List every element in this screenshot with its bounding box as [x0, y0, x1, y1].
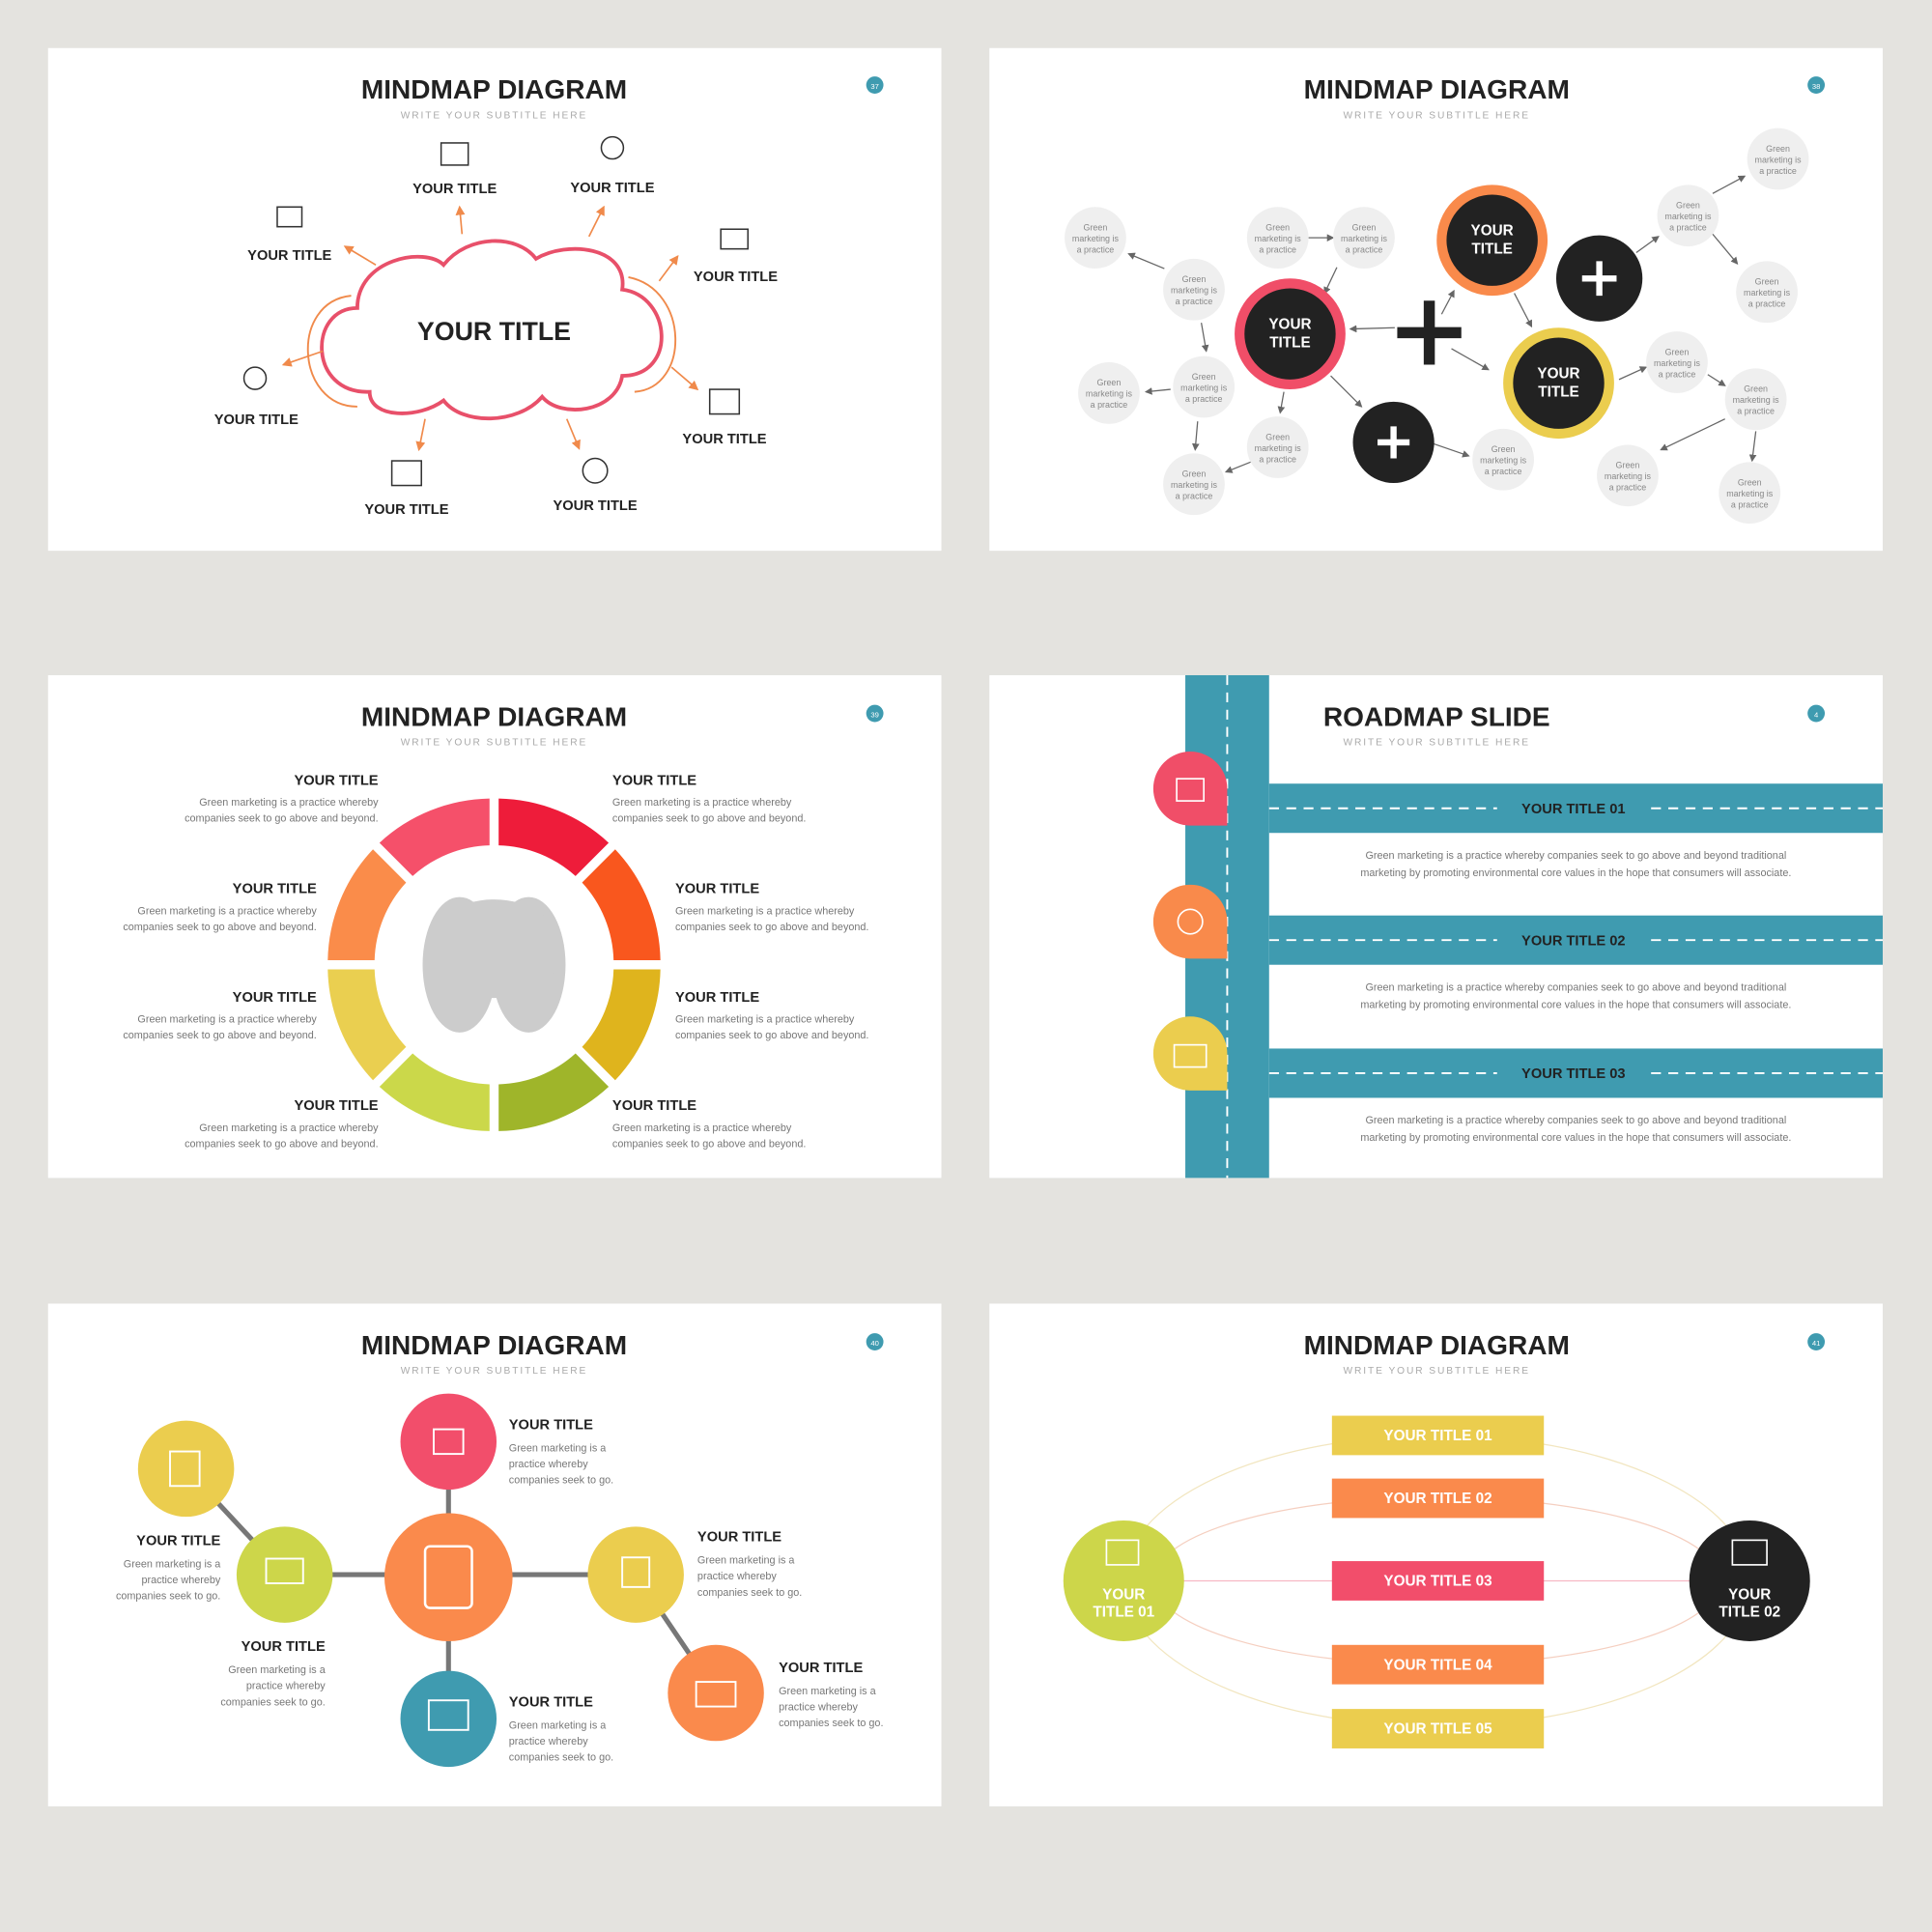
wheel labels: companies seek to go above and beyond. [675, 922, 868, 933]
node texts: marketing is [1733, 395, 1779, 405]
hub labels: YOUR TITLE [509, 1418, 593, 1434]
heading: MINDMAP DIAGRAM [361, 74, 627, 104]
road titles and texts: YOUR TITLE 03 [1521, 1066, 1626, 1082]
road titles and texts: Green marketing is a practice whereby companies seek to go above and beyond traditional [1365, 1115, 1786, 1126]
node texts: Green [1766, 144, 1790, 154]
wheel labels: YOUR TITLE [612, 773, 696, 788]
node texts: marketing is [1072, 234, 1119, 243]
node texts: a practice [1259, 244, 1296, 254]
cloud: YOUR TITLE [417, 317, 571, 346]
node texts: Green [1755, 277, 1778, 287]
wheel labels: YOUR TITLE [612, 1098, 696, 1114]
node texts: marketing is [1744, 288, 1791, 298]
labels with icons [214, 137, 778, 518]
end nodes: TITLE 01 [1093, 1604, 1155, 1620]
road titles and texts [1360, 802, 1791, 1144]
node texts: marketing is [1255, 443, 1301, 453]
page badge [867, 1333, 884, 1350]
rays [283, 207, 697, 450]
title bars: YOUR TITLE 05 [1383, 1721, 1492, 1738]
small nodes [1065, 128, 1808, 524]
page badge: 37 [870, 82, 879, 91]
road titles and texts: YOUR TITLE 02 [1521, 933, 1626, 949]
node texts: Green [1084, 223, 1107, 233]
wheel labels: Green marketing is a practice whereby [612, 1122, 792, 1134]
wheel labels: Green marketing is a practice whereby [675, 905, 855, 917]
heading: MINDMAP DIAGRAM [1304, 74, 1570, 104]
node texts: marketing is [1171, 286, 1218, 296]
heading [1304, 74, 1570, 121]
wheel labels: Green marketing is a practice whereby [199, 1122, 379, 1134]
hub labels: Green marketing is a [509, 1720, 607, 1732]
page badge: 38 [1812, 82, 1820, 91]
hub labels: companies seek to go. [779, 1718, 883, 1729]
hub labels: practice whereby [779, 1701, 859, 1713]
node texts: Green [1097, 378, 1121, 387]
page badge [1807, 705, 1825, 722]
road titles and texts: Green marketing is a practice whereby companies seek to go above and beyond traditional [1365, 850, 1786, 862]
road [1185, 675, 1883, 1178]
node texts: a practice [1669, 223, 1707, 233]
hub labels: YOUR TITLE [509, 1695, 593, 1711]
wheel labels [123, 773, 868, 1150]
panel: wheel mindmap [48, 675, 941, 1178]
hub labels: Green marketing is a [228, 1664, 327, 1676]
wheel labels: companies seek to go above and beyond. [123, 922, 317, 933]
node texts: marketing is [1726, 489, 1774, 498]
node texts: a practice [1748, 299, 1785, 309]
labels with icons: YOUR TITLE [682, 432, 767, 447]
hub labels: Green marketing is a [124, 1558, 221, 1570]
connectors [186, 1441, 716, 1719]
panel: cloud mindmap [48, 48, 941, 551]
cloud [308, 241, 675, 418]
hub labels: practice whereby [509, 1736, 588, 1747]
title bars: YOUR TITLE 01 [1383, 1428, 1492, 1444]
title bars [1332, 1416, 1544, 1748]
wheel labels: YOUR TITLE [233, 990, 317, 1006]
node texts: a practice [1176, 492, 1212, 501]
end nodes: YOUR [1728, 1587, 1771, 1604]
main nodes: YOUR [1537, 366, 1580, 383]
node texts: a practice [1659, 369, 1695, 379]
hub labels: practice whereby [509, 1459, 588, 1470]
node texts: Green [1744, 384, 1768, 394]
hub labels: YOUR TITLE [242, 1639, 326, 1655]
node texts: marketing is [1341, 234, 1388, 243]
hub labels: YOUR TITLE [779, 1661, 863, 1676]
hub labels [116, 1418, 883, 1764]
hub labels: practice whereby [141, 1575, 221, 1586]
node texts: a practice [1077, 244, 1114, 254]
node texts: Green [1738, 478, 1762, 488]
node texts: a practice [1176, 297, 1212, 306]
labels with icons: YOUR TITLE [554, 498, 638, 514]
heading [1304, 1330, 1570, 1377]
node texts: Green [1492, 444, 1516, 454]
node texts: Green [1616, 461, 1639, 470]
page badge: 4 [1814, 710, 1819, 719]
node texts: a practice [1091, 400, 1127, 410]
page badge [1807, 76, 1825, 94]
labels with icons: YOUR TITLE [364, 502, 449, 518]
node texts: Green [1676, 201, 1700, 211]
title bars: YOUR TITLE 04 [1383, 1657, 1492, 1673]
node texts: marketing is [1664, 212, 1712, 221]
hub labels: companies seek to go. [116, 1591, 220, 1603]
main nodes: TITLE [1471, 242, 1513, 258]
hub labels: YOUR TITLE [136, 1533, 221, 1548]
main nodes [1239, 189, 1609, 434]
heading: MINDMAP DIAGRAM [361, 1330, 627, 1360]
heading: WRITE YOUR SUBTITLE HERE [1344, 738, 1530, 749]
node texts: a practice [1185, 394, 1223, 404]
heading: WRITE YOUR SUBTITLE HERE [1344, 110, 1530, 121]
road markers [1153, 752, 1227, 1091]
hub labels: Green marketing is a [779, 1686, 877, 1697]
main nodes: TITLE [1538, 384, 1579, 401]
node texts: marketing is [1654, 358, 1701, 368]
end nodes: TITLE 02 [1719, 1604, 1780, 1620]
page badge: 40 [870, 1339, 879, 1348]
wheel labels: Green marketing is a practice whereby [137, 1014, 317, 1026]
connectors [1128, 176, 1756, 472]
heading: ROADMAP SLIDE [1323, 701, 1550, 731]
page badge [1807, 1333, 1825, 1350]
road titles and texts: marketing by promoting environmental core values in the hope that consumers will associate. [1360, 1132, 1791, 1144]
heading: MINDMAP DIAGRAM [1304, 1330, 1570, 1360]
hub labels: companies seek to go. [697, 1587, 802, 1599]
node texts: a practice [1346, 244, 1382, 254]
ring segments [327, 799, 661, 1131]
connecting curves [1123, 1435, 1749, 1726]
panel: hub mindmap [48, 1303, 941, 1806]
node texts: Green [1265, 432, 1290, 441]
node texts: Green [1665, 347, 1689, 356]
wheel labels: companies seek to go above and beyond. [123, 1030, 317, 1041]
hub labels: companies seek to go. [509, 1475, 613, 1487]
main nodes: YOUR [1471, 223, 1514, 240]
panel: roadmap [989, 675, 1883, 1178]
heading [361, 74, 627, 121]
wheel labels: companies seek to go above and beyond. [612, 1138, 806, 1150]
page badge [867, 76, 884, 94]
node texts [1072, 144, 1802, 510]
wheel labels: YOUR TITLE [294, 773, 379, 788]
heading: WRITE YOUR SUBTITLE HERE [401, 1366, 587, 1377]
labels with icons: YOUR TITLE [412, 182, 497, 197]
node texts: marketing is [1171, 480, 1218, 490]
hub labels: Green marketing is a [509, 1443, 607, 1455]
heading: WRITE YOUR SUBTITLE HERE [401, 738, 587, 749]
heading [361, 1330, 627, 1377]
node texts: Green [1182, 469, 1206, 479]
hub labels: Green marketing is a [697, 1555, 795, 1567]
heading: MINDMAP DIAGRAM [361, 701, 627, 731]
panel: two-node mindmap [989, 1303, 1883, 1806]
wheel labels: YOUR TITLE [675, 990, 759, 1006]
main nodes: TITLE [1269, 335, 1311, 352]
hub labels: practice whereby [246, 1681, 326, 1692]
end nodes [1064, 1520, 1810, 1641]
heading: WRITE YOUR SUBTITLE HERE [401, 110, 587, 121]
hub nodes [138, 1394, 764, 1767]
wheel labels: Green marketing is a practice whereby [675, 1014, 855, 1026]
node texts: Green [1265, 223, 1290, 233]
node texts: marketing is [1180, 383, 1228, 392]
node texts: a practice [1759, 166, 1797, 176]
node texts: a practice [1609, 483, 1646, 493]
hub labels: companies seek to go. [509, 1752, 613, 1764]
node texts: marketing is [1086, 389, 1133, 399]
wheel labels: companies seek to go above and beyond. [185, 813, 379, 825]
node texts: marketing is [1255, 234, 1301, 243]
node texts: marketing is [1755, 155, 1802, 164]
panel: network mindmap [989, 48, 1883, 551]
labels with icons: YOUR TITLE [247, 248, 332, 264]
node texts: Green [1192, 372, 1216, 382]
hub labels: companies seek to go. [220, 1696, 326, 1708]
hub labels: practice whereby [697, 1571, 777, 1582]
node texts: marketing is [1605, 471, 1651, 481]
node texts: a practice [1259, 454, 1296, 464]
node texts: Green [1182, 274, 1206, 284]
road titles and texts: marketing by promoting environmental core values in the hope that consumers will associate. [1360, 999, 1791, 1010]
node texts: Green [1352, 223, 1376, 233]
wheel labels: YOUR TITLE [675, 882, 759, 897]
road titles and texts: marketing by promoting environmental core values in the hope that consumers will associate. [1360, 867, 1791, 879]
road titles and texts: YOUR TITLE 01 [1521, 802, 1626, 817]
page badge: 39 [870, 710, 879, 719]
title bars: YOUR TITLE 02 [1383, 1491, 1492, 1507]
heading [361, 701, 627, 749]
heading [1323, 701, 1550, 749]
hub labels: YOUR TITLE [697, 1530, 781, 1546]
main nodes: YOUR [1268, 317, 1312, 333]
road titles and texts: Green marketing is a practice whereby companies seek to go above and beyond traditional [1365, 982, 1786, 994]
page badge [867, 705, 884, 722]
wheel labels: Green marketing is a practice whereby [612, 797, 792, 809]
labels with icons: YOUR TITLE [694, 270, 778, 285]
wheel labels: companies seek to go above and beyond. [675, 1030, 868, 1041]
wheel labels: YOUR TITLE [233, 882, 317, 897]
node texts: a practice [1731, 500, 1769, 510]
wheel labels: Green marketing is a practice whereby [199, 797, 379, 809]
wheel labels: YOUR TITLE [294, 1098, 379, 1114]
brain [423, 897, 565, 1033]
page badge: 41 [1812, 1339, 1820, 1348]
node texts: a practice [1737, 407, 1775, 416]
wheel labels: companies seek to go above and beyond. [185, 1138, 379, 1150]
heading: WRITE YOUR SUBTITLE HERE [1344, 1366, 1530, 1377]
plus icons [1353, 236, 1642, 483]
node texts: marketing is [1480, 456, 1527, 466]
wheel labels: Green marketing is a practice whereby [137, 905, 317, 917]
node texts: a practice [1485, 467, 1521, 476]
labels with icons: YOUR TITLE [570, 181, 655, 196]
title bars: YOUR TITLE 03 [1383, 1574, 1492, 1590]
end nodes: YOUR [1102, 1587, 1145, 1604]
wheel labels: companies seek to go above and beyond. [612, 813, 806, 825]
labels with icons: YOUR TITLE [214, 412, 298, 428]
